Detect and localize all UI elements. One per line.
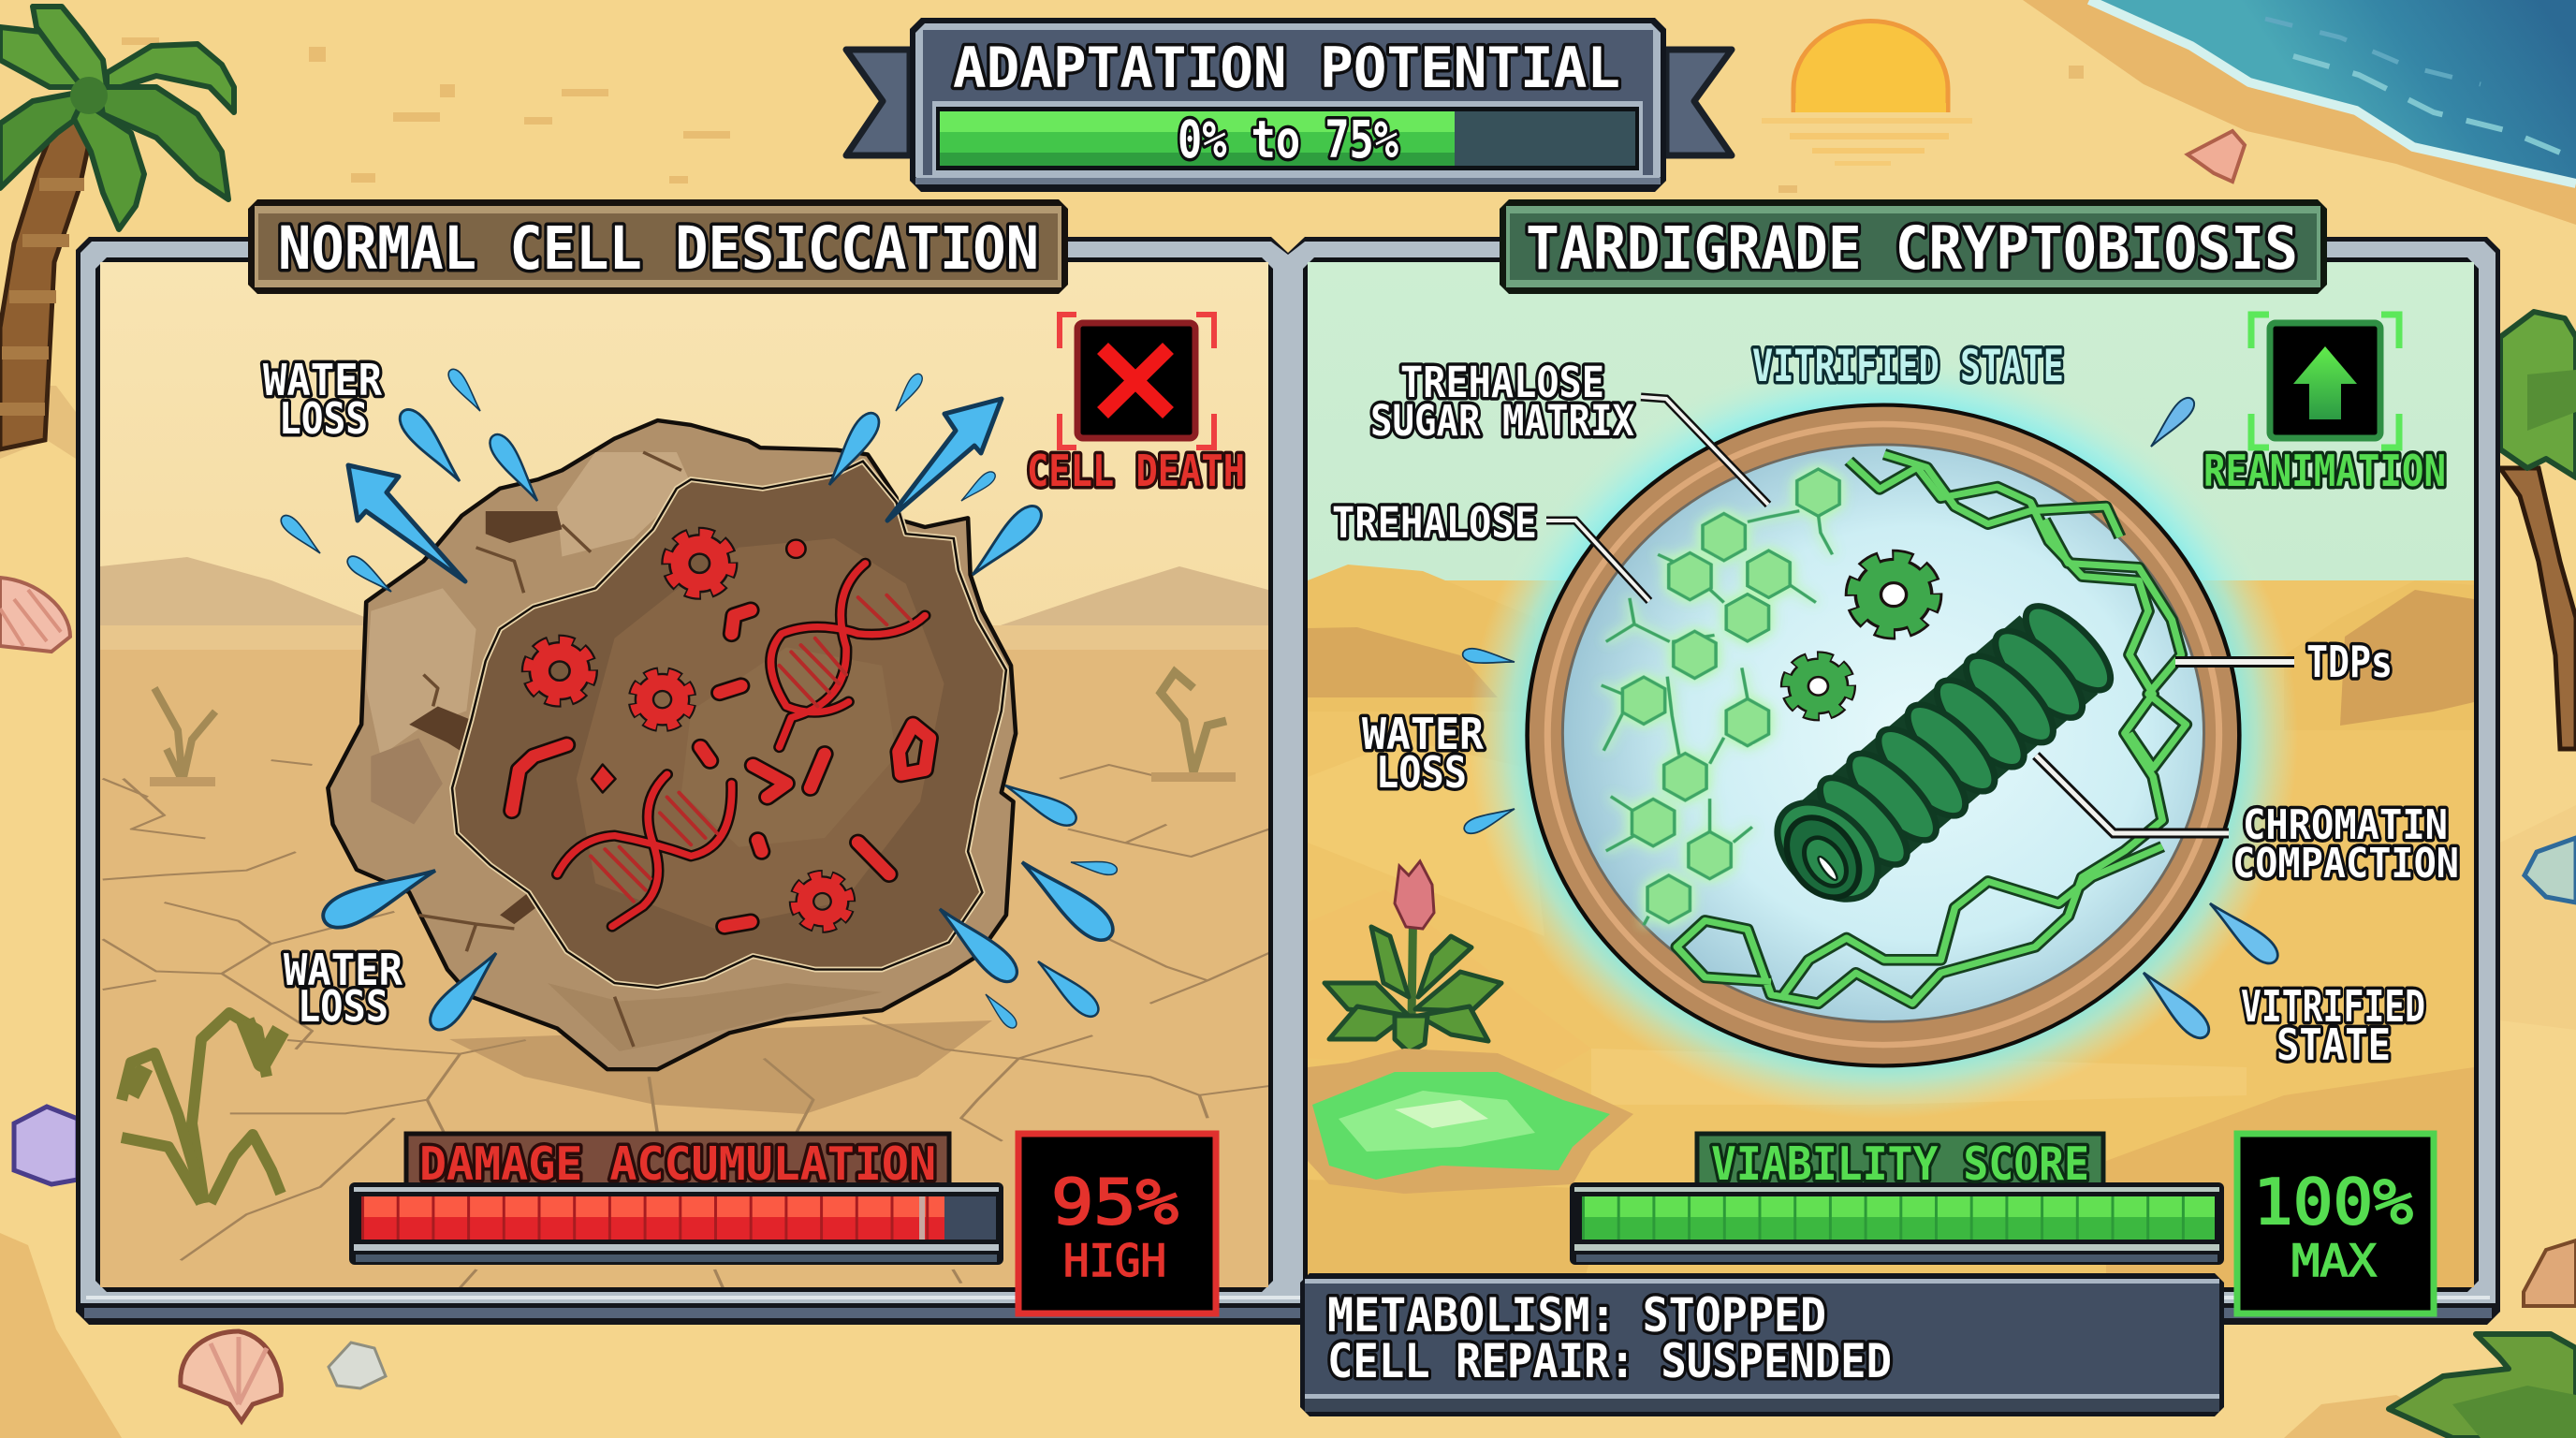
leader highlight: sugar matrix — [1641, 397, 1768, 505]
palm tree: left — [0, 7, 234, 449]
palm tree: bottom right — [2389, 1334, 2576, 1438]
label: trehalose: TREHALOSE — [1332, 498, 1537, 548]
withered plant — [122, 1013, 281, 1203]
label: water loss lower: LOSS — [298, 981, 388, 1032]
leader: TDPs — [2175, 656, 2294, 668]
vitrified cell — [1469, 352, 2298, 1119]
green pool — [1308, 1049, 1633, 1194]
label: chromatin compaction: COMPACTION — [2232, 840, 2459, 888]
water drops: normal cell — [278, 366, 1120, 1035]
broken protein gears — [528, 533, 857, 935]
label: trehalose sugar matrix: SUGAR MATRIX — [1370, 396, 1634, 446]
viability score bar — [1570, 1134, 2224, 1265]
panel: normal cell desiccation — [100, 262, 1269, 1313]
wet sand and sea — [2023, 0, 2576, 225]
dead shrub: right — [1151, 672, 1236, 777]
sun — [1762, 22, 1972, 166]
label: reanimation: REANIMATION — [2203, 446, 2446, 496]
label: vitrified state lower: VITRIFIED — [2241, 981, 2425, 1032]
label: cell death: CELL DEATH — [1027, 446, 1245, 496]
progress bar: 0% to 75% — [932, 101, 1643, 177]
label: chromatin compaction — [2232, 801, 2459, 888]
TDP strands — [1676, 454, 2186, 1004]
label: damage accumulation: DAMAGE ACCUMULATION — [419, 1137, 936, 1191]
heading: tardigrade cryptobiosis: TARDIGRADE CRYPTOBIOSIS — [1526, 214, 2298, 283]
label: vitrified state lower — [2241, 981, 2425, 1070]
panel: tardigrade cryptobiosis — [1308, 262, 2474, 1313]
ribbon: right — [1666, 50, 1732, 155]
label: water loss upper: LOSS — [279, 393, 368, 444]
palm tree: right — [2500, 312, 2576, 749]
leader: trehalose — [1546, 521, 1649, 601]
stat: 95% high: HIGH — [1063, 1236, 1166, 1287]
protein fragments — [512, 540, 929, 927]
label: vitrified state top: VITRIFIED STATE — [1752, 341, 2064, 392]
dead shrub: left — [150, 688, 215, 782]
info panel: metabolism and repair: METABOLISM: STOPPED — [1327, 1288, 1826, 1343]
progress bar: 0% to 75%: 0% to 75% — [1178, 110, 1398, 169]
label: water loss lower — [284, 945, 402, 1032]
label: water loss lower: WATER — [284, 945, 402, 995]
leader highlight: chromatin — [2036, 756, 2229, 833]
label: TDPs: TDPs — [2306, 637, 2393, 687]
label: water loss right: LOSS — [1376, 747, 1467, 798]
trehalose sugar matrix — [1602, 469, 1839, 925]
leader highlight: trehalose — [1546, 521, 1649, 601]
label: chromatin compaction: CHROMATIN — [2243, 801, 2448, 849]
leader: chromatin — [2036, 756, 2229, 833]
title banner: adaptation potential — [910, 18, 1666, 192]
arrow: water loss upper right — [887, 399, 1002, 521]
desert scene — [100, 262, 1269, 1290]
label: water loss right — [1362, 709, 1484, 798]
label: trehalose sugar matrix: TREHALOSE — [1400, 358, 1604, 407]
desiccated cell — [328, 420, 1016, 1069]
water drops: tardigrade cell — [1462, 394, 2283, 1044]
heading: normal cell desiccation: NORMAL CELL DESICCATION — [278, 214, 1039, 283]
heading: tardigrade cryptobiosis — [1500, 199, 2327, 294]
stat: 100% max — [2237, 1134, 2434, 1313]
label: water loss upper — [263, 355, 382, 444]
compacted chromatin coil — [1758, 594, 2124, 917]
info panel: metabolism and repair — [1300, 1273, 2224, 1416]
leader: sugar matrix — [1641, 397, 1768, 505]
icon: cell death — [1060, 315, 1214, 448]
damage accumulation bar — [349, 1134, 1003, 1265]
damaged DNA helix: upper — [771, 564, 925, 747]
info panel: metabolism and repair: CELL REPAIR: SUSPENDED — [1327, 1334, 1892, 1388]
label: water loss upper: WATER — [263, 355, 382, 405]
stat: 95% high: 95% — [1051, 1166, 1178, 1239]
ribbon: left — [846, 50, 910, 155]
heading: normal cell desiccation — [248, 199, 1068, 294]
arrow: water loss upper left — [348, 465, 465, 581]
stat: 95% high — [1018, 1134, 1216, 1313]
plant with flower — [1325, 861, 1501, 1052]
damaged DNA helix: lower — [557, 774, 732, 927]
protein gears: green — [1787, 557, 1934, 715]
label: trehalose sugar matrix — [1370, 358, 1634, 446]
label: water loss right: WATER — [1362, 709, 1484, 759]
panel frame — [76, 237, 2500, 1325]
beach scene — [1308, 262, 2474, 1292]
icon: reanimation — [2251, 315, 2399, 448]
stat: 100% max: 100% — [2253, 1166, 2413, 1239]
title text: ADAPTATION POTENTIAL — [953, 36, 1620, 101]
label: viability score: VIABILITY SCORE — [1711, 1137, 2089, 1191]
leader highlight: TDPs — [2175, 659, 2294, 665]
label: vitrified state lower: STATE — [2276, 1020, 2391, 1070]
stat: 100% max: MAX — [2291, 1236, 2377, 1287]
